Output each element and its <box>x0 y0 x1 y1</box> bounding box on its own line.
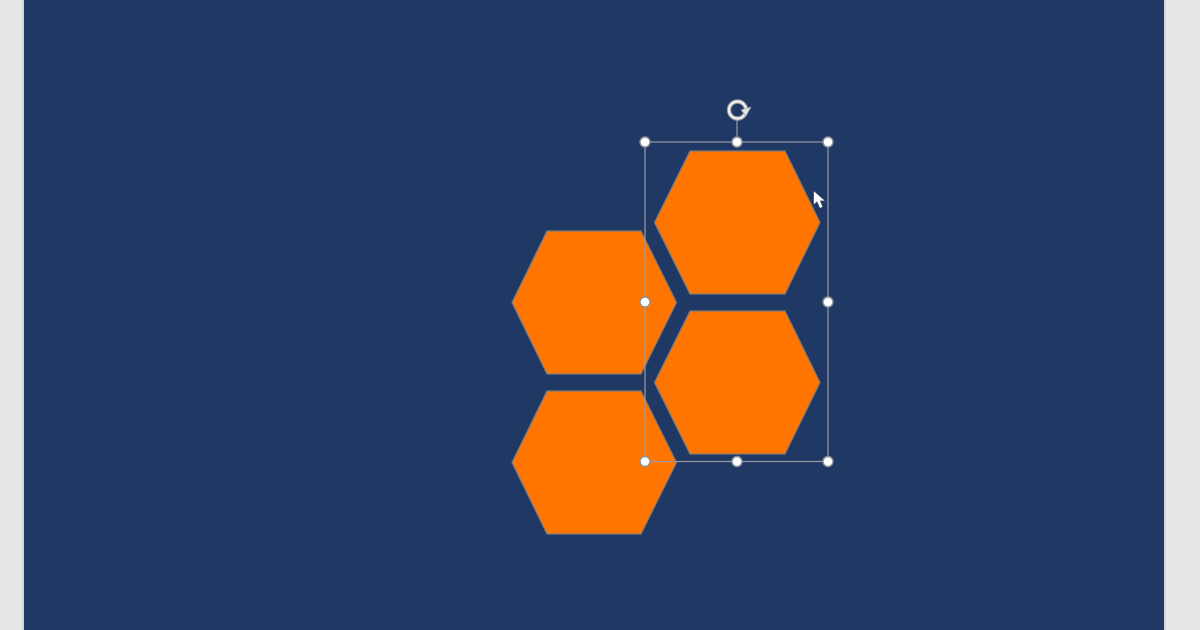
rotation handle stem <box>736 120 738 142</box>
icon: mouse cursor <box>814 190 826 208</box>
hexagon: bottom left <box>512 391 676 534</box>
hexagon: top right <box>654 151 820 294</box>
resize handles <box>640 137 833 466</box>
icon: rotation handle <box>729 102 751 118</box>
selection bounding box <box>645 142 828 462</box>
hexagon: middle left <box>512 231 676 374</box>
hexagon: lower right <box>654 311 820 454</box>
selection frame <box>640 102 833 466</box>
hexagon cluster <box>512 151 820 534</box>
